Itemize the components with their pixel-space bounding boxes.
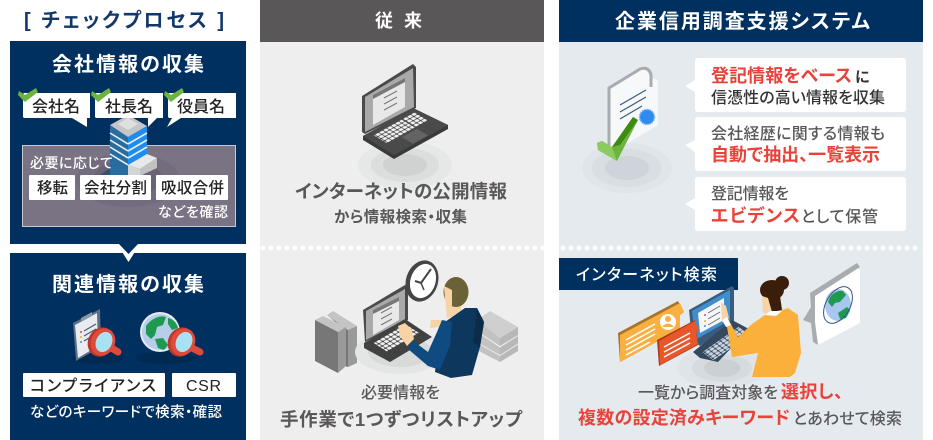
bubble: automatic extraction: 自動で抽出、一覧表示: [711, 145, 880, 165]
icon: books: [315, 311, 357, 373]
bubble: president name: 社長名: [105, 98, 153, 116]
chip: merger: 吸収合併: [161, 179, 224, 197]
worker body: [445, 295, 462, 318]
panel: check process column: [10, 9, 246, 440]
bubble: evidence storage: エビデンス: [711, 205, 800, 226]
chip: relocation: [29, 175, 75, 200]
icon: wall clock: [400, 256, 444, 306]
chip: CSR: [172, 373, 236, 397]
header: credit investigation system: [559, 0, 923, 42]
bubble: evidence storage: 登記情報を: [711, 185, 789, 203]
text: confirm: などを確認: [158, 204, 228, 220]
icon: building: [100, 115, 157, 178]
text: keyword search: などのキーワードで検索・確認: [30, 404, 222, 421]
header: conventional: 従 来: [375, 11, 422, 31]
chip: company split: [80, 175, 151, 200]
chip: merger: [156, 175, 228, 200]
bubble: registry based: 登記情報をベース: [711, 66, 852, 86]
bubble: automatic extraction: 会社経歴に関する情報も: [711, 125, 885, 143]
heading: check process: [ チェックプロセス ]: [24, 9, 224, 32]
text: select from list: 一覧から調査対象を: [638, 383, 778, 402]
chip: compliance: コンプライアンス: [30, 377, 156, 395]
bubble: officer name: [164, 88, 236, 127]
heading: company info: 会社情報の収集: [52, 53, 204, 76]
icon: globe with magnifier: [135, 312, 200, 364]
icon: document with check: [582, 68, 672, 193]
text: keyword search: 複数の設定済みキーワード: [578, 408, 790, 428]
chip: compliance: [23, 373, 165, 397]
text: select from list: 選択し、: [781, 382, 843, 402]
icon: red message card: [657, 320, 699, 366]
header: conventional: [260, 0, 544, 42]
panel: corporate credit system column: [559, 0, 923, 440]
bubble: evidence storage: として保管: [801, 208, 878, 226]
bubble: president name: [91, 88, 163, 127]
panel: conventional column: [260, 0, 544, 440]
text: manual listing: 手作業で1つずつリストアップ: [280, 409, 523, 430]
icon: laptop with worker: [355, 256, 484, 378]
chip: relocation: 移転: [37, 179, 68, 197]
panel: company info collection: [10, 41, 246, 244]
text: select from list: [638, 382, 843, 402]
icon: laptop: [358, 64, 452, 189]
text: as needed: 必要に応じて: [30, 155, 113, 171]
panel: related info collection: [23, 272, 236, 421]
bubble: company name: 会社名: [32, 98, 80, 116]
illustration: internet search worker: [618, 263, 860, 388]
tag: internet search: インターネット検索: [576, 266, 717, 284]
icon: server boxes: [477, 311, 518, 362]
icon: clipboard with magnifier: [72, 309, 124, 364]
box: as needed: [22, 146, 236, 226]
bubble: registry based: 信憑性の高い情報を収集: [711, 89, 885, 107]
bubble: registry based: に: [855, 69, 870, 86]
text: keyword search: [578, 408, 902, 428]
chip: CSR: CSR: [186, 378, 221, 395]
bubble: officer name: 役員名: [177, 98, 225, 116]
arrow: chevron down: [10, 244, 246, 440]
chip: company split: 会社分割: [84, 179, 147, 197]
bubble: company name: [18, 88, 90, 127]
text: keyword search: とあわせて検索: [793, 410, 902, 428]
text: required info: 必要情報を: [361, 384, 440, 402]
text: internet public info: インターネットの公開情報: [295, 181, 507, 202]
icon: globe speech panel: [803, 263, 860, 345]
text: search and collect: から情報検索・収集: [334, 207, 467, 226]
heading: related info: 関連情報の収集: [52, 272, 204, 296]
tag: internet search: [559, 258, 738, 290]
bubble: registry based: [685, 58, 906, 112]
worker woman: [721, 276, 801, 377]
bubble: evidence storage: [685, 177, 906, 231]
icon: orange profile card: [618, 301, 684, 362]
icon: laptop: [689, 286, 749, 362]
header: credit investigation system: 企業信用調査支援システム: [615, 10, 871, 33]
bubble: automatic extraction: [685, 117, 906, 171]
